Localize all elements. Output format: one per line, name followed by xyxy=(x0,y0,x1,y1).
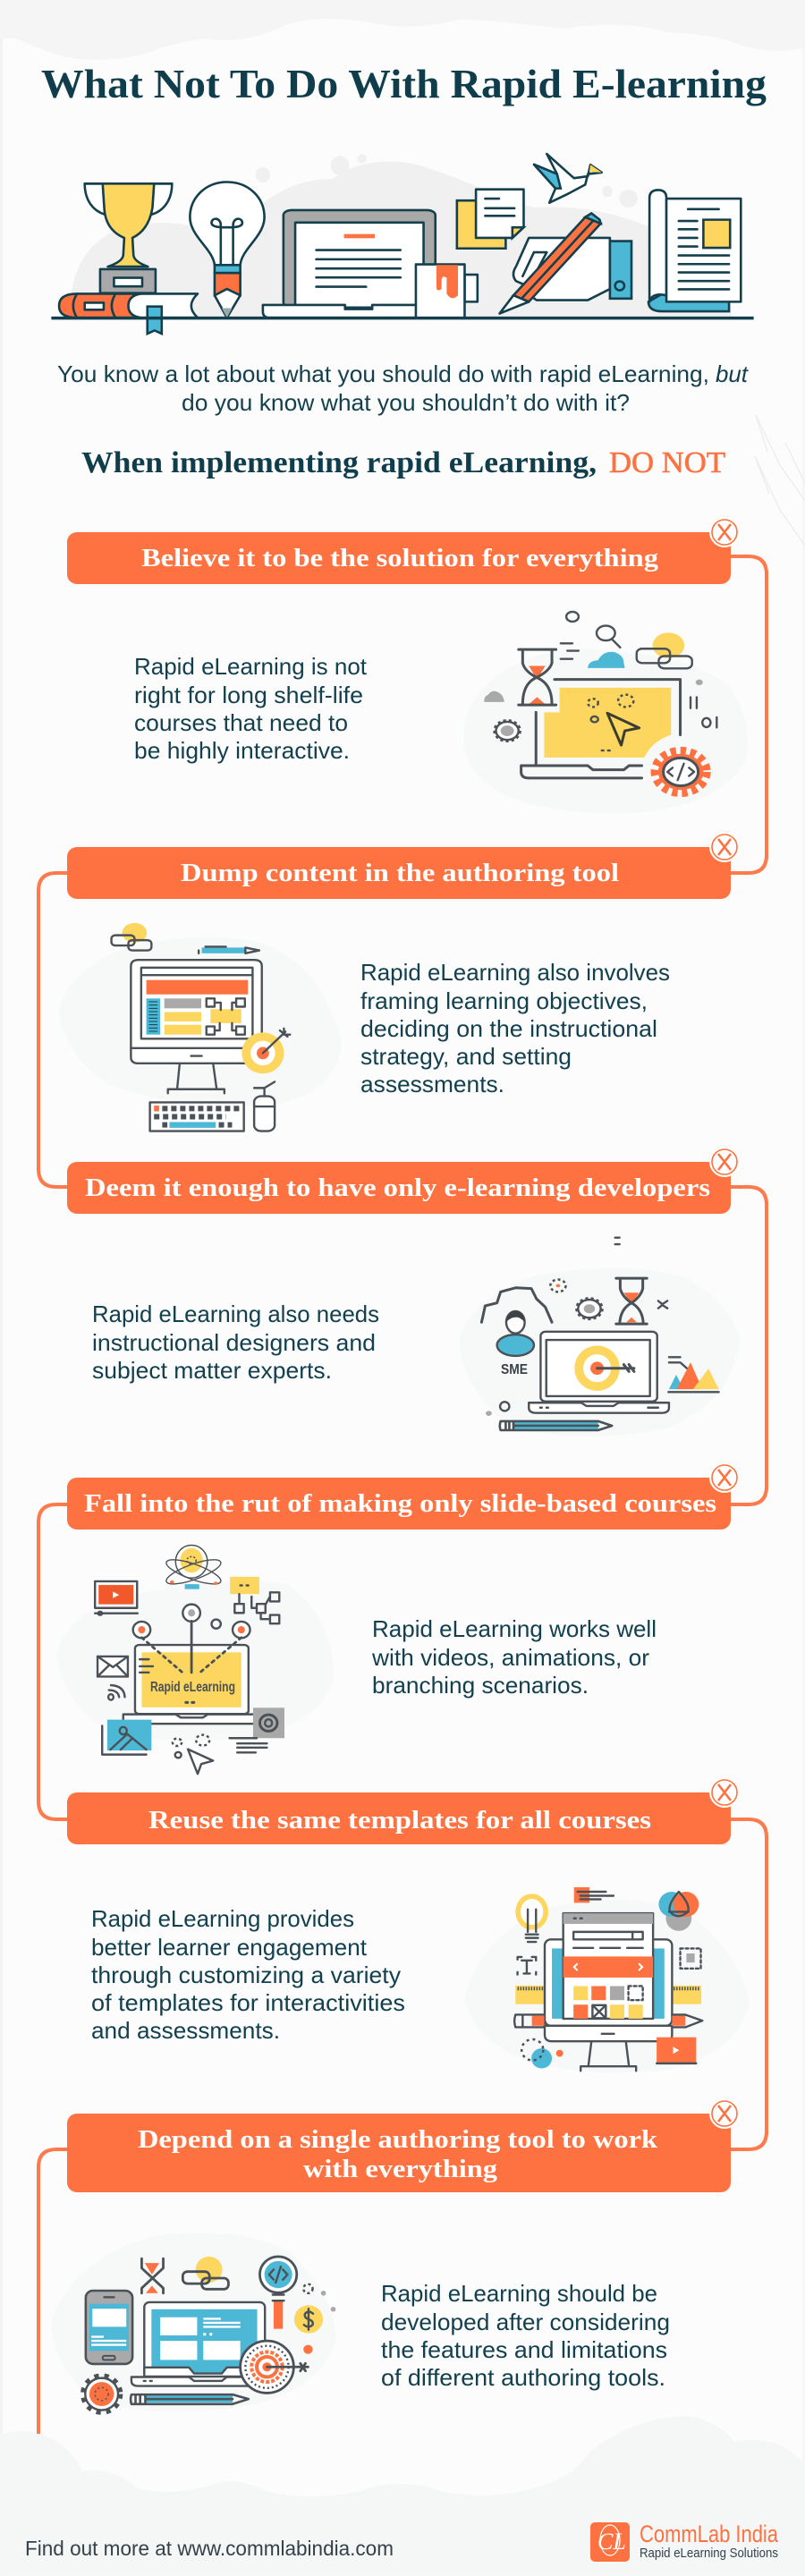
banner 5: Reuse the same templates for all courses xyxy=(148,1806,651,1835)
illustration: laptop with media icons xyxy=(56,1546,334,1774)
banner 6: with everything xyxy=(303,2155,498,2183)
panel 6: depend on a single authoring tool xyxy=(51,2098,740,2412)
illustration: subject matter expert and laptop target xyxy=(460,1238,740,1436)
body text 4 xyxy=(371,1615,657,1699)
coffee mug xyxy=(416,265,478,318)
brand name: CommLab India xyxy=(640,2521,779,2547)
body text 5: better learner engagement xyxy=(91,1934,368,1961)
icon: cross badge xyxy=(709,517,740,547)
body text 6 xyxy=(381,2280,670,2391)
hand holding a pencil xyxy=(500,213,631,314)
title: What Not To Do With Rapid E-learning xyxy=(41,61,767,106)
SME label: SME xyxy=(501,1362,528,1377)
body text 6: developed after considering xyxy=(381,2309,670,2335)
stack of books xyxy=(59,293,198,334)
panel 3: deem it enough xyxy=(67,1147,740,1436)
body text 2: strategy, and setting xyxy=(360,1043,572,1070)
brand tagline: Rapid eLearning Solutions xyxy=(640,2546,778,2561)
sticky notes xyxy=(457,190,523,249)
body text 3: instructional designers and xyxy=(92,1329,376,1356)
icon: cross badge xyxy=(709,1147,740,1177)
banner 3 xyxy=(67,1162,731,1214)
hero illustration: desk with trophy, bulb, laptop, pencil and document xyxy=(51,154,754,334)
subheading: DO NOT xyxy=(609,446,725,479)
icon: CommLab logo xyxy=(590,2522,630,2562)
banner 2 xyxy=(67,847,731,899)
body text 4: Rapid eLearning works well xyxy=(372,1615,657,1642)
intro text: You know a lot about what you should do with rapid eLearning, xyxy=(57,360,709,387)
body text 6: Rapid eLearning should be xyxy=(381,2280,657,2307)
intro text xyxy=(57,360,750,416)
banner 6: Depend on a single authoring tool to work xyxy=(138,2125,658,2154)
banner 5 xyxy=(67,1792,731,1844)
illustration: desktop with target, keyboard and mouse xyxy=(59,923,342,1131)
icon: cross badge xyxy=(709,1462,740,1493)
icon: cross badge xyxy=(709,1777,740,1808)
body text 5: and assessments. xyxy=(91,2017,280,2044)
intro text: but xyxy=(716,360,750,387)
body text 3: subject matter experts. xyxy=(92,1357,332,1384)
trophy xyxy=(85,183,172,293)
body text 2 xyxy=(360,959,670,1097)
panel 2: dump content xyxy=(59,832,740,1131)
body text 5: Rapid eLearning provides xyxy=(91,1905,354,1932)
body text 1: right for long shelf-life xyxy=(134,682,363,708)
banner 6 xyxy=(67,2114,731,2192)
body text 4: branching scenarios. xyxy=(372,1672,589,1699)
light bulb pencil xyxy=(190,182,265,318)
banner 4 xyxy=(67,1478,731,1530)
body text 2: assessments. xyxy=(360,1071,504,1097)
subheading: When implementing rapid eLearning, xyxy=(81,446,597,479)
panel 4: fall into the rut xyxy=(56,1462,740,1774)
body text 6: of different authoring tools. xyxy=(381,2364,665,2391)
body text 5 xyxy=(91,1905,405,2044)
body text 5: of templates for interactivities xyxy=(91,1989,405,2016)
banner 2: Dump content in the authoring tool xyxy=(181,859,619,887)
body text 1: be highly interactive. xyxy=(134,737,350,764)
body text 2: Rapid eLearning also involves xyxy=(360,959,670,986)
footer link text: Find out more at www.commlabindia.com xyxy=(25,2537,394,2560)
body text 2: deciding on the instructional xyxy=(360,1015,657,1042)
origami bird xyxy=(534,154,602,203)
panel 5: reuse the same templates xyxy=(67,1777,750,2072)
connector line between panels xyxy=(38,556,767,2434)
icon: cross badge xyxy=(709,832,740,862)
icon: cross badge xyxy=(709,2098,740,2129)
banner 3: Deem it enough to have only e-learning developers xyxy=(85,1174,710,1202)
body text 4: with videos, animations, or xyxy=(371,1644,649,1671)
intro text: do you know what you shouldn’t do with it? xyxy=(182,389,630,416)
banner 4: Fall into the rut of making only slide-based courses xyxy=(84,1489,716,1518)
Rapid eLearning label on screen: Rapid eLearning xyxy=(150,1680,235,1695)
body text 6: the features and limitations xyxy=(381,2336,667,2363)
icon: CommLab logo: CL xyxy=(597,2529,626,2555)
body text 5: through customizing a variety xyxy=(91,1962,401,1988)
illustration: phone, laptop, target and gear xyxy=(51,2233,336,2412)
laptop with document xyxy=(263,210,436,318)
body text 1: Rapid eLearning is not xyxy=(134,653,368,680)
body text 1: courses that need to xyxy=(134,709,348,736)
body text 1 xyxy=(134,653,368,764)
illustration: laptop with cursor and gear xyxy=(463,612,748,813)
newspaper scroll xyxy=(648,190,741,311)
body text 3 xyxy=(92,1301,379,1384)
body text 3: Rapid eLearning also needs xyxy=(92,1301,379,1327)
banner 1 xyxy=(67,532,731,584)
body text 2: framing learning objectives, xyxy=(360,987,648,1014)
banner 1: Believe it to be the solution for everything xyxy=(141,544,659,572)
illustration: desktop with templates xyxy=(464,1887,750,2072)
panel 1: believe it to be the solution xyxy=(67,517,748,813)
footer xyxy=(25,2521,779,2562)
